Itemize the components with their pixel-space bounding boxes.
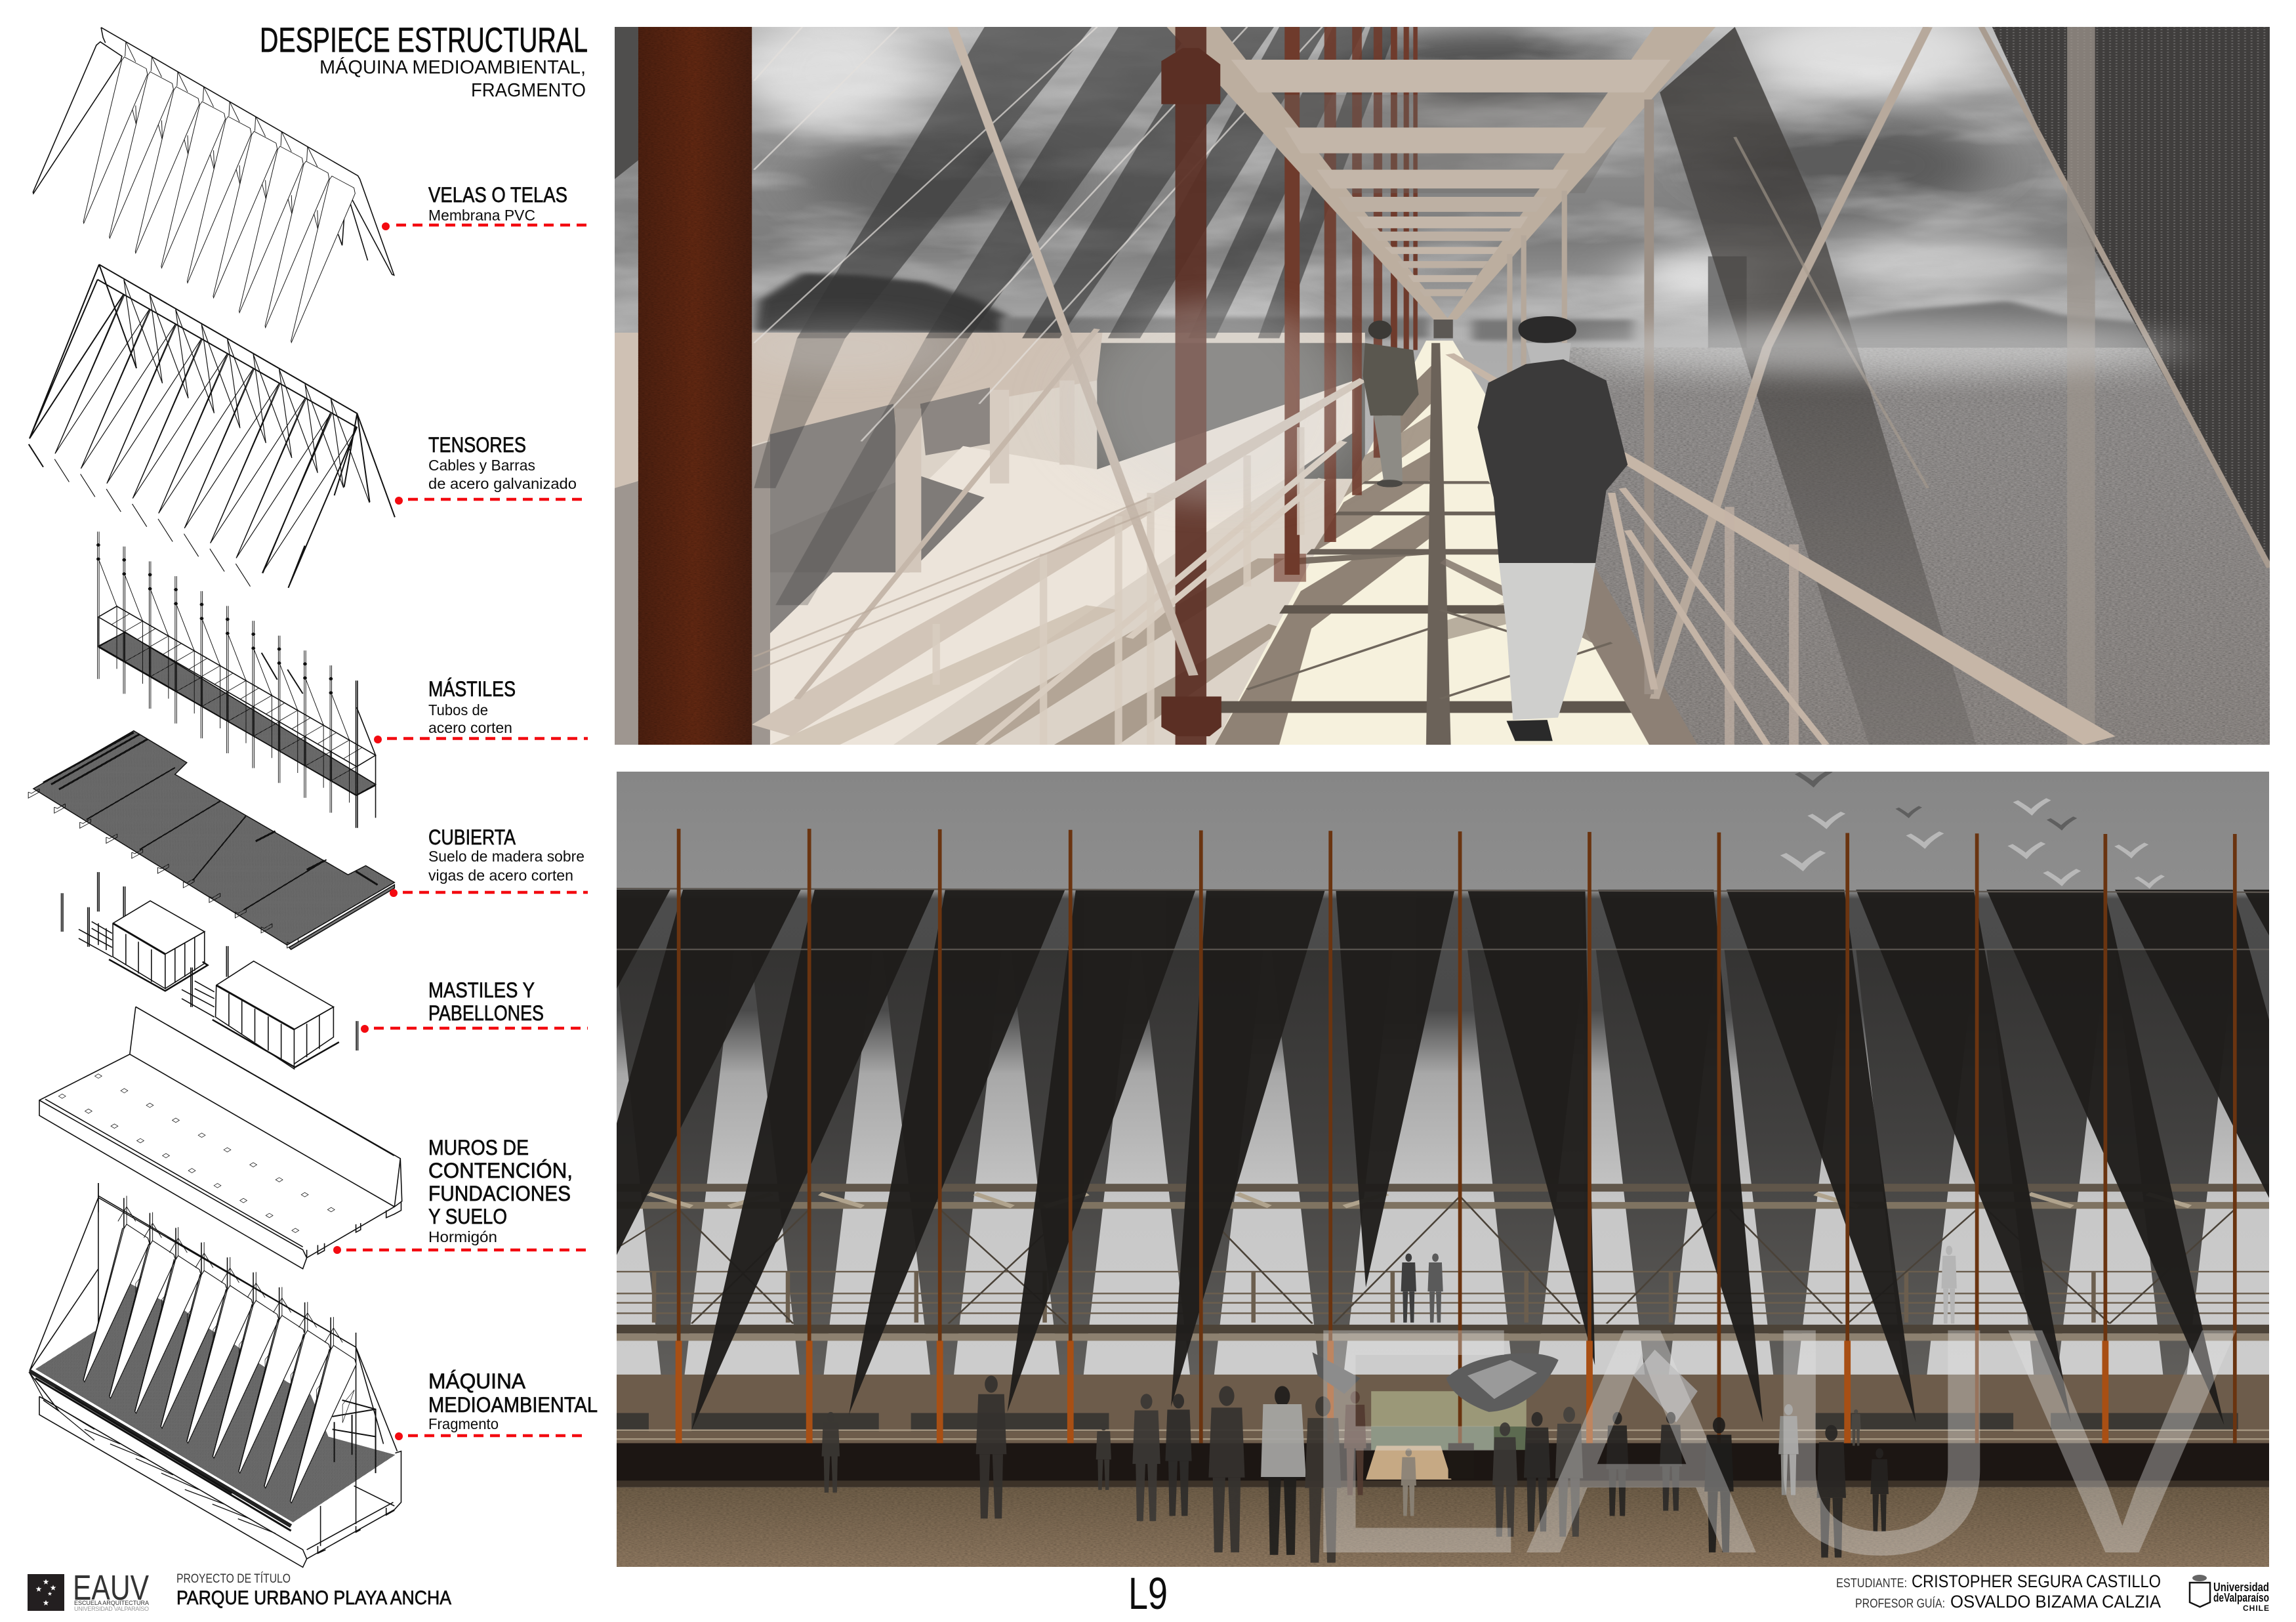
logo: Universidad de Valparaiso: Universidad bbox=[2213, 1581, 2269, 1594]
label: velas o telas: VELAS O TELAS bbox=[428, 183, 567, 207]
deck beams bbox=[617, 1325, 2269, 1341]
logo: EAUV school bbox=[28, 1568, 149, 1612]
title: MÁQUINA MEDIOAMBIENTAL, bbox=[319, 56, 586, 78]
drawing: mastiles y pabellones bbox=[62, 872, 358, 1069]
label: maquina medioambiental: MÁQUINA bbox=[428, 1369, 526, 1393]
fog bbox=[733, 301, 2180, 507]
drawing: velas o telas bbox=[33, 28, 394, 343]
person: far man bbox=[1363, 320, 1419, 488]
drawing: maquina medioambiental bbox=[30, 1183, 401, 1568]
second horizontal bbox=[617, 948, 2269, 950]
label: velas o telas: Membrana PVC bbox=[428, 207, 535, 224]
label: mastiles bbox=[374, 677, 588, 743]
people on bridge bbox=[1401, 1245, 1957, 1323]
credits: PROFESOR GUÍA: bbox=[1855, 1597, 1945, 1611]
label: muros de contencion: CONTENCIÓN, bbox=[428, 1159, 573, 1182]
wall and plinth bbox=[617, 1375, 2269, 1487]
title: FRAGMENTO bbox=[471, 80, 586, 101]
label: cubierta: CUBIERTA bbox=[428, 825, 516, 849]
walkway railing and cables bbox=[617, 1196, 2269, 1323]
drawing: muros de contencion bbox=[39, 1007, 402, 1269]
ceiling frame bbox=[1167, 27, 1715, 339]
project title: PROYECTO DE TÍTULO bbox=[176, 1572, 291, 1586]
label: maquina medioambiental bbox=[395, 1369, 598, 1440]
label: mastiles y pabellones bbox=[361, 978, 588, 1033]
drawing: cubierta bbox=[28, 731, 394, 949]
label: tensores: TENSORES bbox=[428, 433, 526, 457]
logo: Universidad de Valparaiso: CHILE bbox=[2243, 1604, 2269, 1613]
trees and tower bbox=[754, 257, 2158, 352]
railing right bbox=[1445, 353, 2116, 745]
label: muros de contencion: MUROS DE bbox=[428, 1136, 529, 1159]
birds bbox=[1783, 771, 2163, 886]
project title bbox=[176, 1572, 451, 1609]
credits bbox=[1836, 1571, 2161, 1612]
sheet number: L9 bbox=[1128, 1568, 1168, 1619]
logo: EAUV school: UNIVERSIDAD VALPARAÍSO bbox=[74, 1606, 149, 1612]
deck floor bbox=[1210, 341, 1697, 745]
crowd bbox=[822, 1375, 1889, 1563]
label: muros de contencion: Y SUELO bbox=[428, 1205, 507, 1228]
building left bbox=[615, 333, 1365, 745]
logo: Universidad de Valparaiso bbox=[2190, 1575, 2269, 1613]
label: velas o telas bbox=[382, 183, 588, 230]
far rust columns bbox=[1274, 27, 1418, 582]
label: maquina medioambiental: Fragmento bbox=[428, 1415, 499, 1432]
title: DESPIECE ESTRUCTURAL bbox=[260, 21, 588, 60]
title bbox=[260, 21, 588, 101]
sail shadows, left bbox=[754, 27, 1397, 605]
drawing: mastiles bbox=[96, 531, 376, 828]
flags bbox=[1312, 1350, 1698, 1423]
masts bbox=[679, 829, 2235, 1443]
logo: EAUV school: EAUV bbox=[73, 1568, 149, 1608]
ground right bbox=[1558, 348, 2270, 745]
label: mastiles y pabellones: PABELLONES bbox=[428, 1001, 544, 1025]
drawing: tensores bbox=[29, 264, 395, 694]
logo: Universidad de Valparaiso: deValparaíso bbox=[2213, 1591, 2269, 1604]
label: maquina medioambiental: MEDIOAMBIENTAL bbox=[428, 1393, 598, 1417]
front sail layer bbox=[381, 890, 2296, 1430]
label: mastiles: acero corten bbox=[428, 719, 512, 736]
label: muros de contencion: FUNDACIONES bbox=[428, 1182, 571, 1205]
label: tensores: de acero galvanizado bbox=[428, 475, 577, 492]
label: cubierta: Suelo de madera sobre bbox=[428, 848, 584, 865]
label: muros de contencion: Hormigón bbox=[428, 1228, 497, 1245]
ground bbox=[617, 1487, 2269, 1567]
photo: walkway perspective bbox=[615, 27, 2270, 745]
credits: CRISTOPHER SEGURA CASTILLO bbox=[1912, 1571, 2161, 1591]
label: muros de contencion bbox=[333, 1136, 588, 1254]
label: tensores: Cables y Barras bbox=[428, 457, 535, 474]
upper bridge beams bbox=[617, 1184, 2269, 1209]
label: mastiles: MÁSTILES bbox=[428, 677, 516, 701]
label: cubierta bbox=[390, 825, 588, 897]
right wing cables and bands bbox=[1509, 27, 2270, 745]
central view to stadium bbox=[1366, 1391, 1527, 1480]
person: old man bbox=[1477, 316, 1628, 741]
label: cubierta: vigas de acero corten bbox=[428, 867, 573, 884]
photo: elevation with sails bbox=[617, 772, 2269, 1567]
credits: OSVALDO BIZAMA CALZIA bbox=[1950, 1592, 2161, 1612]
back sail layer bbox=[615, 949, 2235, 1480]
watermark: EAUV: EAUV bbox=[1295, 1261, 2240, 1621]
logo: EAUV school: ESCUELA ARQUITECTURA bbox=[74, 1600, 149, 1606]
big rust column bbox=[615, 27, 752, 745]
second rust column bbox=[1161, 27, 1221, 745]
railing left bbox=[752, 27, 1366, 745]
label: tensores bbox=[395, 433, 588, 505]
project title: PARQUE URBANO PLAYA ANCHA bbox=[176, 1587, 451, 1609]
cables, left bbox=[754, 27, 1322, 442]
label: mastiles: Tubos de bbox=[428, 701, 488, 718]
label: mastiles y pabellones: MASTILES Y bbox=[428, 978, 535, 1002]
credits: ESTUDIANTE: bbox=[1836, 1577, 1907, 1591]
